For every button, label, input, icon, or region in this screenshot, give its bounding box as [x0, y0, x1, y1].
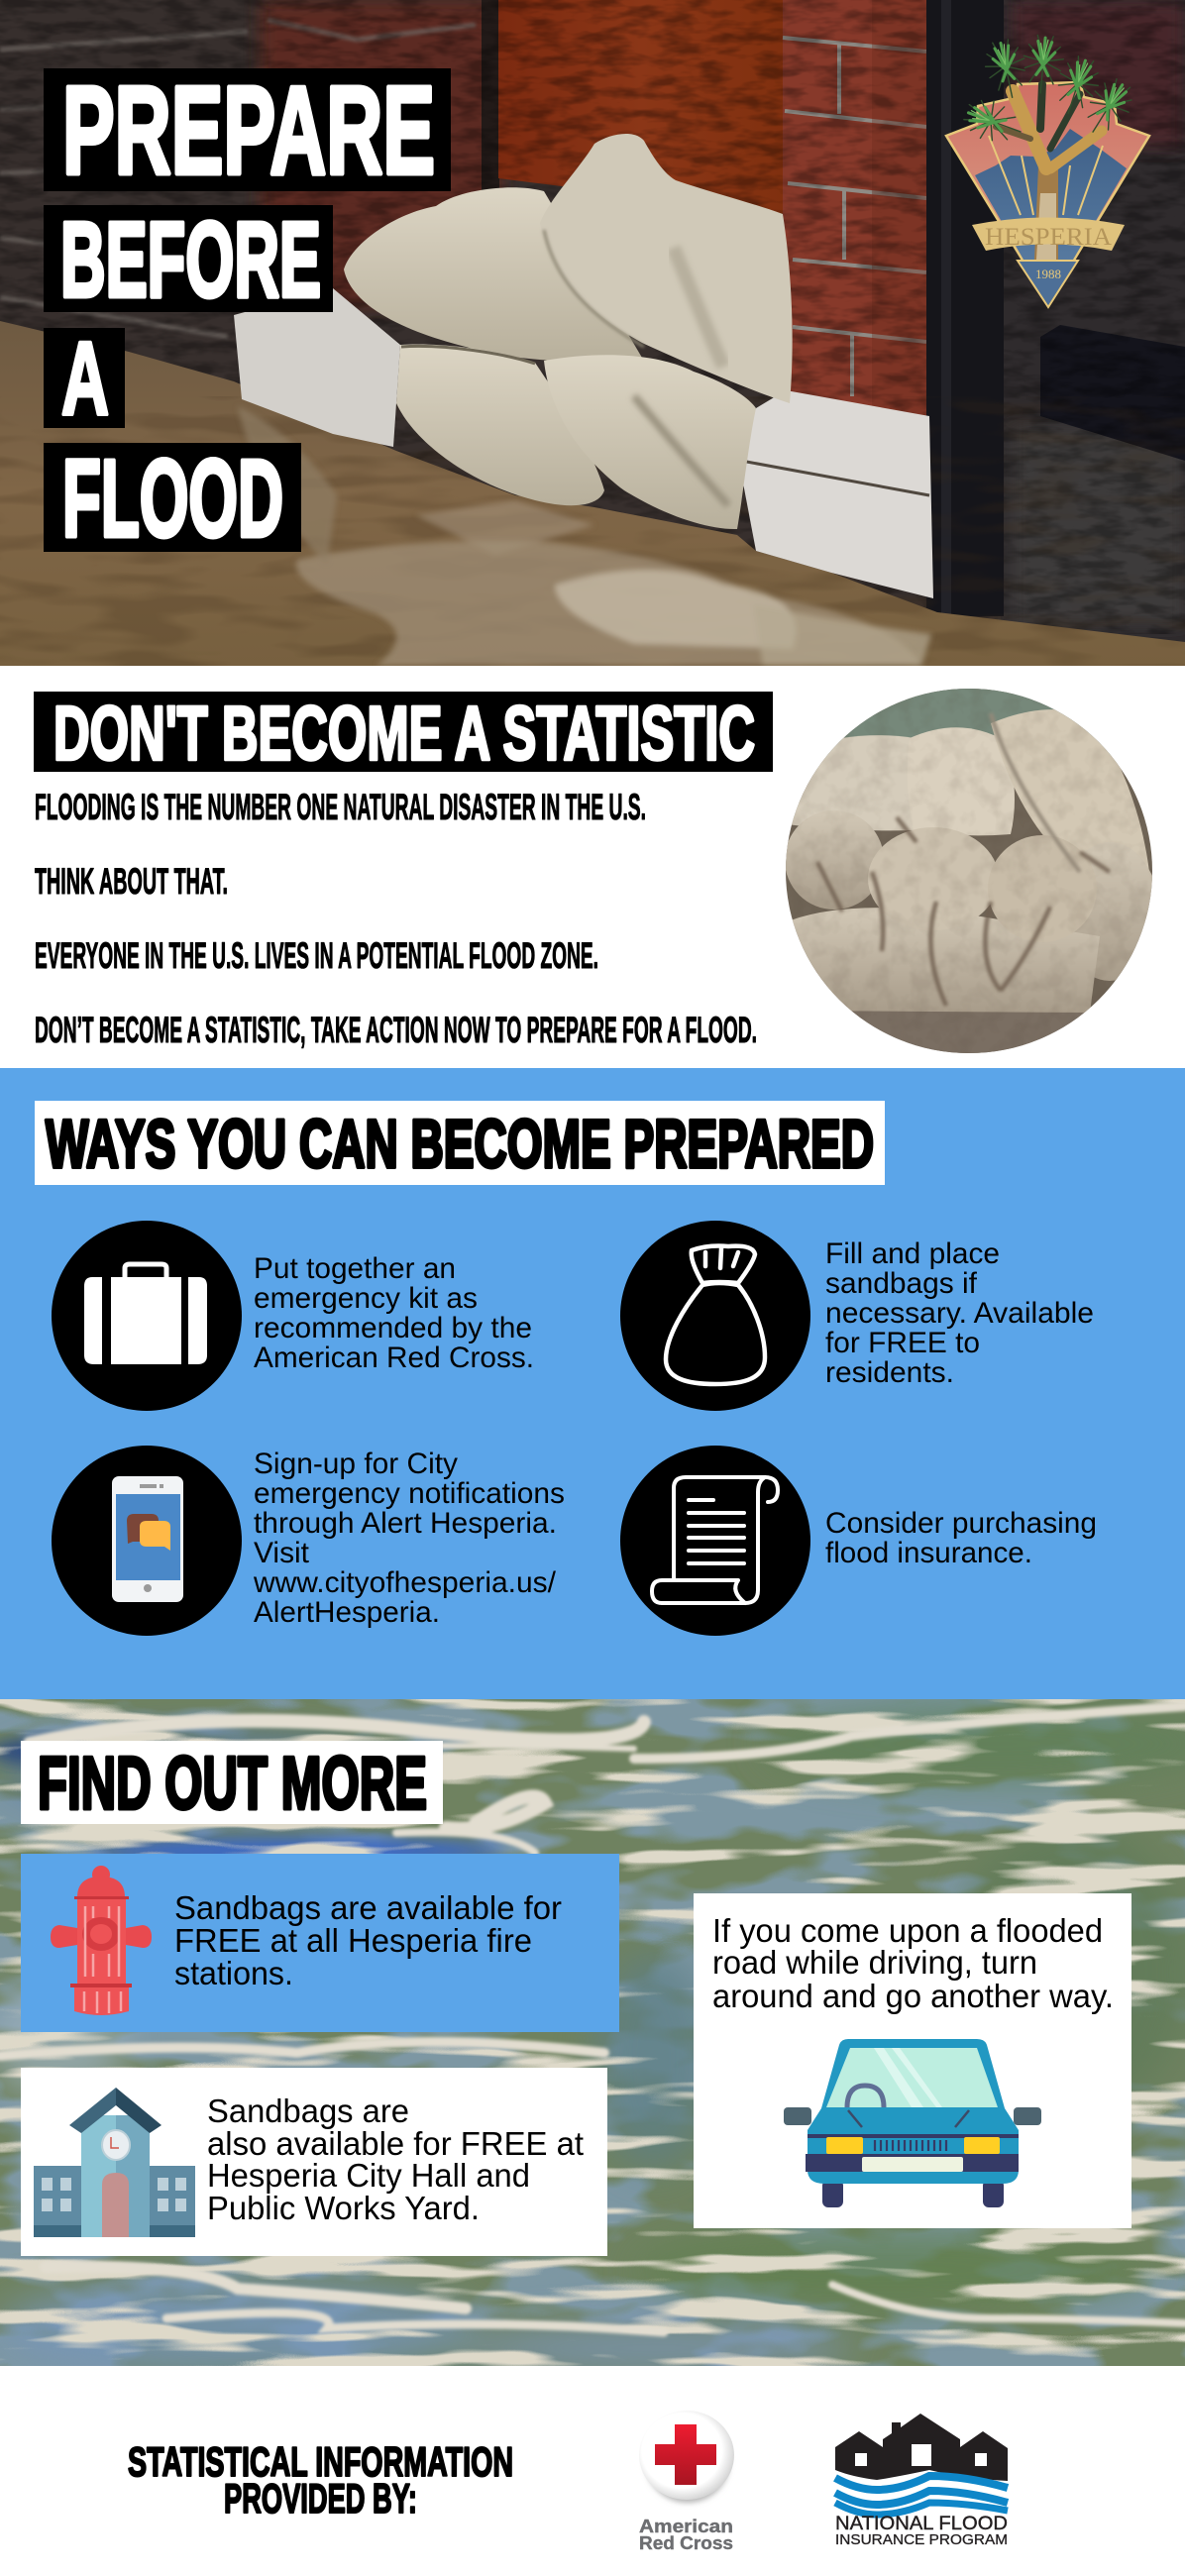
wall texture	[0, 0, 1185, 634]
text: residents.	[825, 1356, 954, 1389]
icon: City of Hesperia logo: HESPERIA	[985, 224, 1112, 251]
text: emergency notifications	[254, 1477, 565, 1510]
text: recommended by the	[254, 1312, 532, 1344]
icon: fire hydrant	[51, 1866, 152, 2015]
title line: PREPARE	[44, 60, 451, 200]
title line: PREPARE: PREPARE	[62, 60, 435, 200]
text	[254, 1252, 534, 1374]
text: sandbags if	[825, 1267, 978, 1300]
text: statistical information provided by: STATISTICAL INFORMATION	[128, 2438, 513, 2485]
photo: rippling water	[0, 1699, 1185, 2378]
title line: A	[44, 321, 125, 437]
logo: American Red Cross: Red Cross	[639, 2533, 733, 2553]
footer: sources	[0, 2366, 1185, 2576]
item: sandbags	[620, 1221, 1094, 1411]
section: Ways you can become prepared	[0, 1068, 1185, 1699]
text: flood insurance.	[825, 1537, 1032, 1569]
text	[207, 2093, 584, 2226]
icon: smartphone	[52, 1446, 242, 1636]
heading: DON'T BECOME A STATISTIC	[54, 692, 755, 777]
title line: BEFORE	[44, 199, 333, 319]
text: around and go another way.	[712, 1978, 1114, 2014]
photo: stacked sandbags in a circle	[783, 687, 1159, 1058]
logo: National Flood Insurance Program: INSURANCE PROGRAM	[835, 2532, 1008, 2548]
hero photo: sandbags against a flooded doorway	[0, 0, 1185, 666]
text: emergency kit as	[254, 1282, 478, 1315]
heading: FIND OUT MORE	[38, 1742, 427, 1825]
text: statistical information provided by	[128, 2438, 513, 2522]
brick pillar	[783, 0, 927, 421]
text block: EVERYONE IN THE U.S. LIVES IN A POTENTIAL FLOOD ZONE.	[35, 934, 598, 976]
text block: THINK ABOUT THAT.	[35, 860, 228, 902]
white plinths	[234, 288, 400, 447]
text: FREE at all Hesperia fire	[174, 1922, 532, 1959]
text	[174, 1889, 562, 1991]
title: PREPARE BEFORE A FLOOD	[44, 60, 451, 560]
text	[253, 1448, 565, 1629]
text: Sandbags are available for	[174, 1889, 562, 1926]
icon: sandbag	[620, 1221, 810, 1411]
text: for FREE to	[825, 1327, 980, 1359]
water reflections	[238, 406, 931, 666]
icon: City of Hesperia logo	[946, 34, 1149, 307]
text: road while driving, turn	[712, 1944, 1037, 1981]
logo: American Red Cross: American	[639, 2517, 733, 2536]
icon: car front	[784, 2039, 1041, 2207]
text: Fill and place	[825, 1237, 1000, 1270]
text: Public Works Yard.	[207, 2190, 480, 2226]
icon: insurance scroll	[620, 1446, 810, 1636]
item: flood insurance	[620, 1446, 1097, 1636]
water	[0, 321, 1185, 666]
text: Consider purchasing	[825, 1507, 1097, 1540]
text: through Alert Hesperia.	[254, 1507, 557, 1540]
text: Visit	[254, 1537, 310, 1569]
right dark wall	[1001, 0, 1185, 666]
text: Sandbags are	[207, 2093, 409, 2129]
text: Hesperia City Hall and	[207, 2157, 530, 2194]
text: If you come upon a flooded	[712, 1912, 1103, 1949]
icon: city hall building	[34, 2088, 195, 2237]
text: statistical information provided by: PROVIDED BY:	[224, 2475, 417, 2522]
heading	[21, 1741, 443, 1825]
title line: A: A	[61, 321, 109, 437]
logo: National Flood Insurance Program	[835, 2414, 1008, 2548]
text: also available for FREE at	[207, 2125, 584, 2162]
icon: City of Hesperia logo: 1988	[1035, 267, 1061, 281]
text: AlertHesperia.	[254, 1596, 440, 1629]
section: Don't become a statistic	[0, 666, 1185, 1068]
heading	[34, 692, 773, 777]
text	[825, 1507, 1097, 1569]
panel: sandbags at City Hall	[21, 2068, 607, 2256]
text: www.cityofhesperia.us/	[253, 1566, 557, 1599]
section: Find out more, water photo background	[0, 1699, 1185, 2378]
panel: flooded road warning	[694, 1893, 1131, 2228]
icon: suitcase	[52, 1221, 242, 1411]
drainpipe	[926, 0, 1004, 616]
text: stations.	[174, 1955, 293, 1991]
text: necessary. Available	[825, 1297, 1094, 1330]
item: alert notifications	[52, 1446, 565, 1636]
logo: American Red Cross	[639, 2411, 734, 2553]
logo: National Flood Insurance Program: NATIONAL FLOOD	[835, 2514, 1008, 2534]
text: Sign-up for City	[254, 1448, 458, 1480]
text	[712, 1912, 1114, 2014]
text block	[35, 786, 757, 1050]
title line: FLOOD: FLOOD	[62, 438, 283, 560]
title line: BEFORE: BEFORE	[60, 199, 321, 319]
heading	[35, 1101, 885, 1185]
item: emergency kit	[52, 1221, 534, 1411]
text: Put together an	[254, 1252, 456, 1285]
text	[825, 1237, 1094, 1389]
sandbags	[344, 134, 793, 529]
panel: sandbags at fire stations	[21, 1854, 619, 2032]
text: American Red Cross.	[254, 1342, 534, 1374]
title line: FLOOD	[44, 438, 301, 560]
door	[498, 0, 785, 214]
